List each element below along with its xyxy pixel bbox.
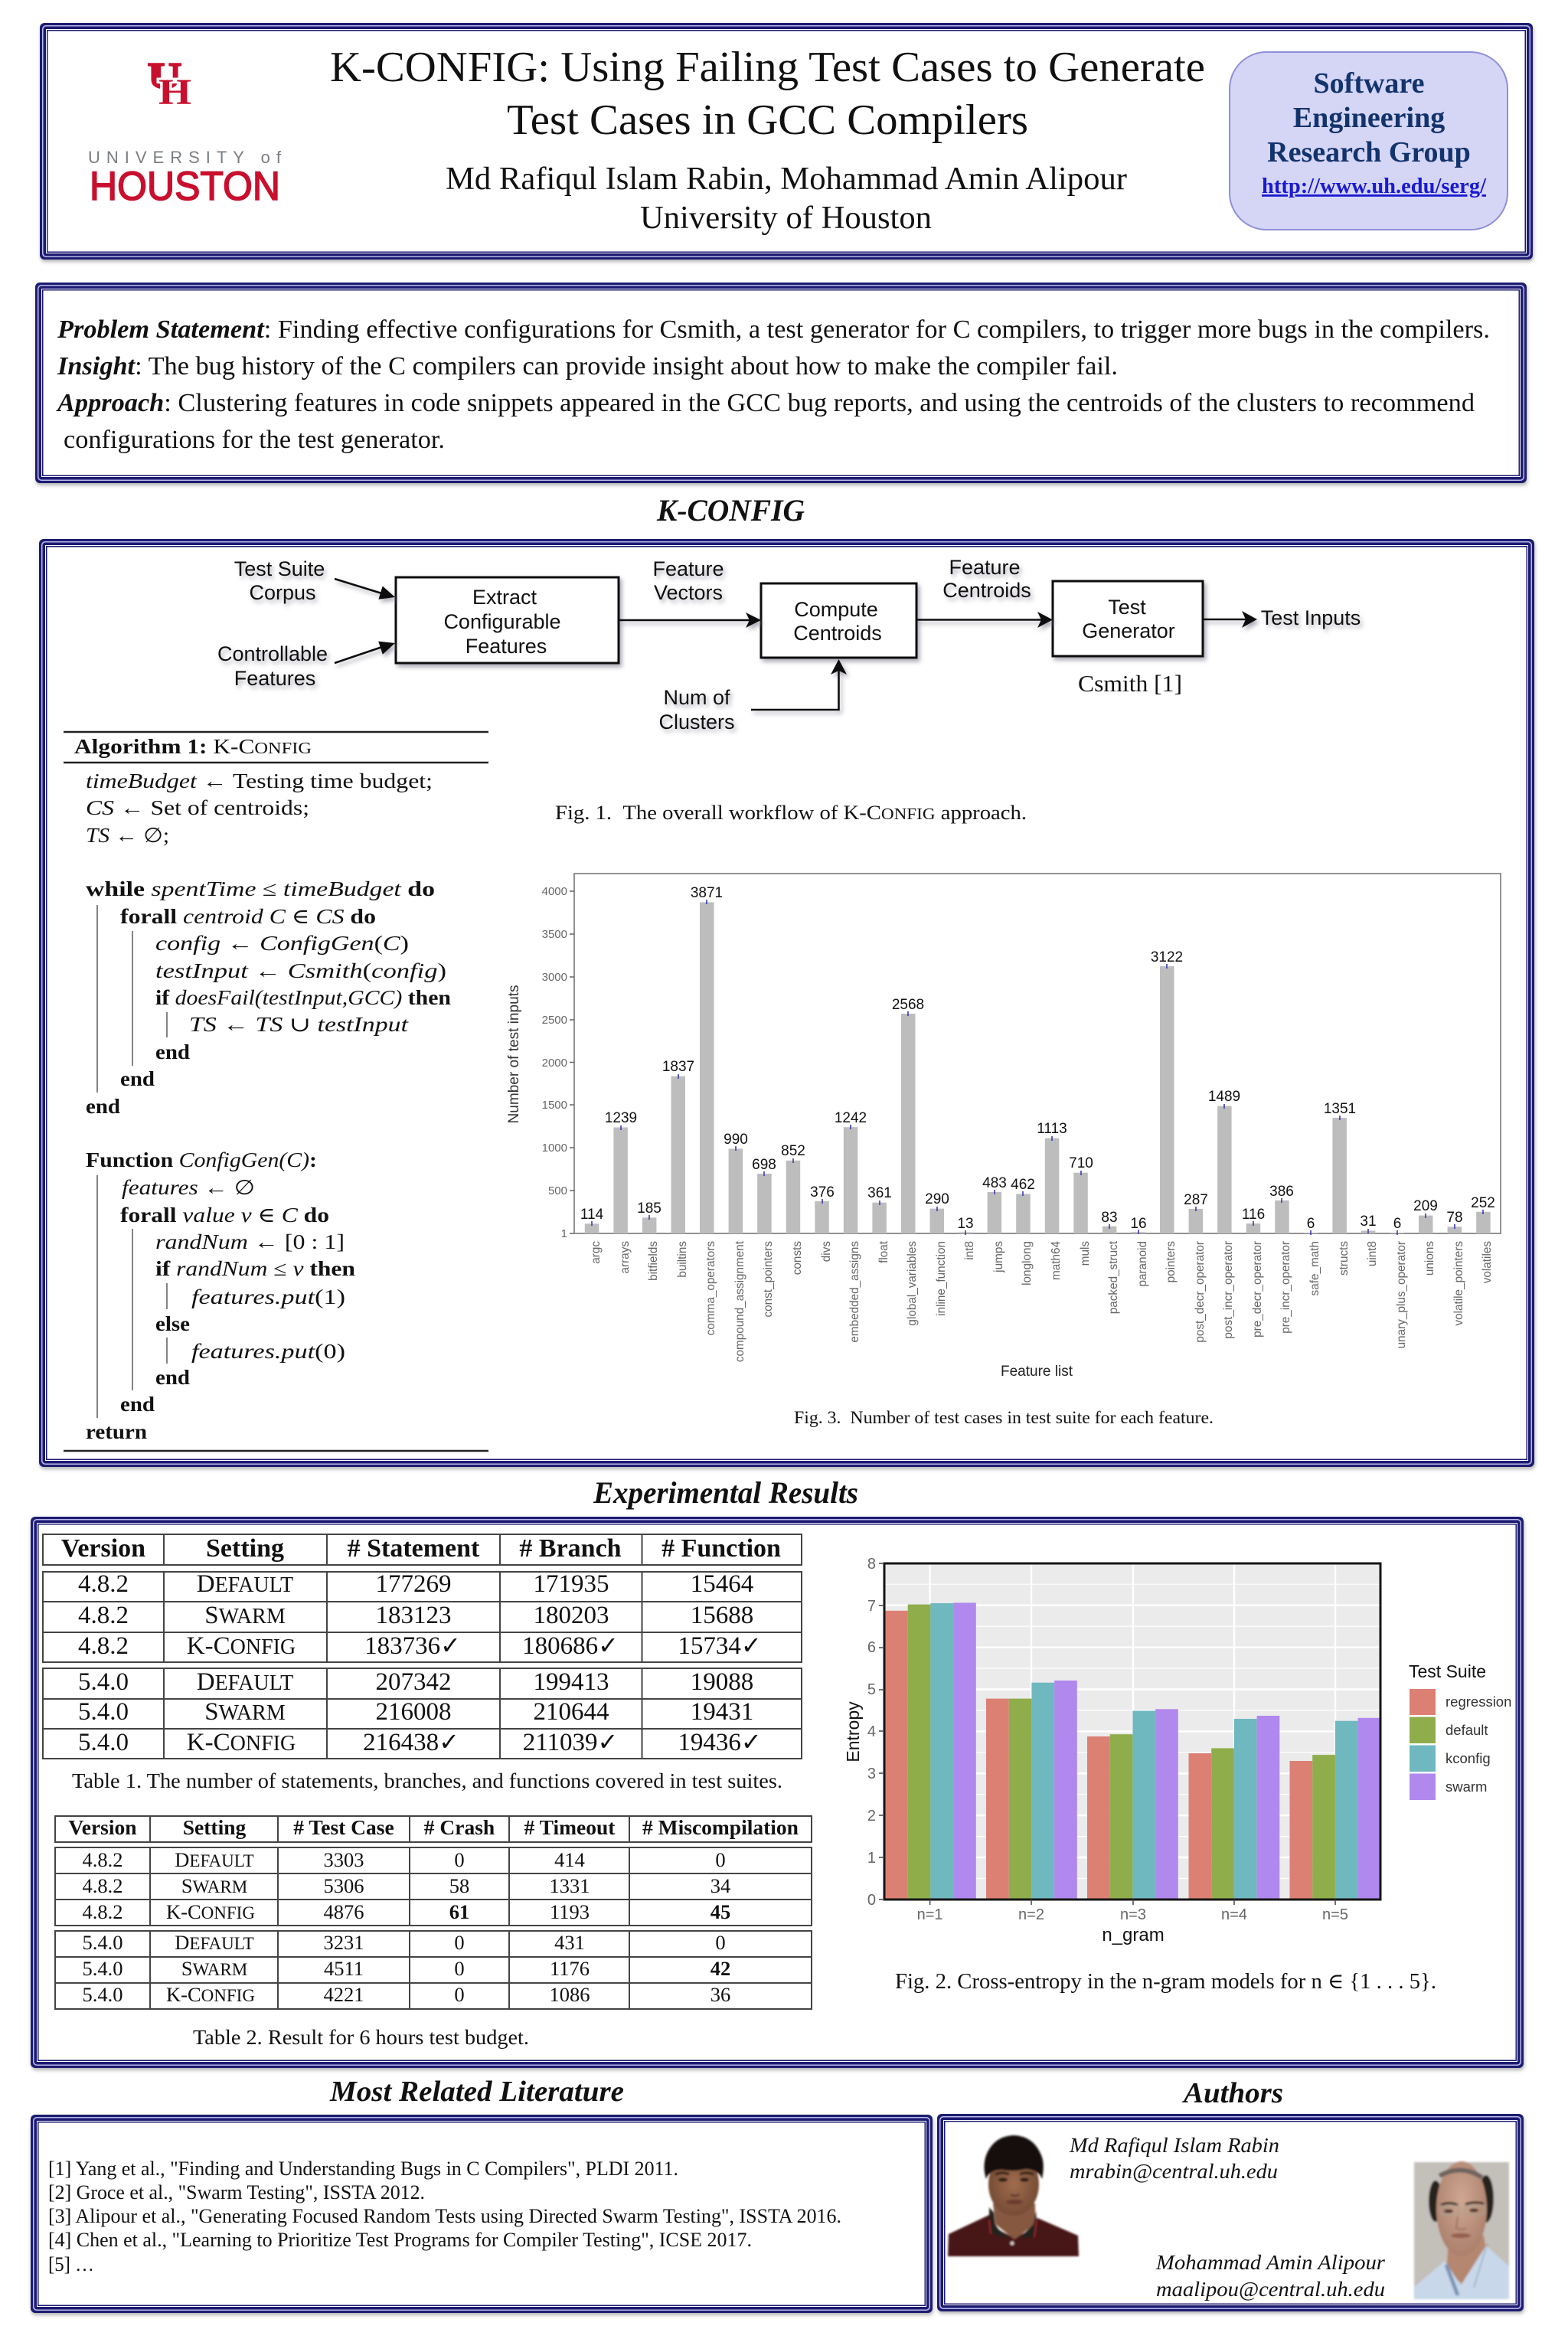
x axis labels: pre_incr_operator <box>1279 1241 1292 1334</box>
workflow diagram: Features <box>466 635 547 658</box>
workflow diagram: Controllable <box>217 642 328 665</box>
workflow diagram: Clusters <box>658 710 735 733</box>
x axis labels: packed_struct <box>1107 1240 1120 1314</box>
table 2 rows: K-CONFIG <box>166 1983 255 2006</box>
table 1 rows: K-CONFIG <box>187 1729 296 1756</box>
value labels: 116 <box>1242 1207 1265 1223</box>
table 1 rows: 211039✓ <box>523 1727 618 1756</box>
workflow diagram: Centroids <box>793 622 882 645</box>
authors and affiliation: Md Rafiqul Islam Rabin, Mohammad Amin Alipour <box>446 162 1127 197</box>
value labels: 2568 <box>892 997 924 1013</box>
workflow diagram <box>217 556 1361 733</box>
panel: header <box>40 23 1533 260</box>
callout: research group: http://www.uh.edu/serg/ <box>1262 175 1487 198</box>
algorithm lines: timeBudget ← Testing time budget; <box>86 769 433 792</box>
x axis: n=5 <box>1322 1906 1348 1923</box>
value labels: 698 <box>752 1157 776 1173</box>
table 2 rows: DEFAULT <box>175 1848 254 1871</box>
workflow diagram: Compute <box>794 598 878 621</box>
workflow diagram: Corpus <box>249 581 316 604</box>
panel: related literature <box>31 2115 933 2313</box>
x axis labels: pre_decr_operator <box>1251 1241 1264 1338</box>
bars: regression <box>885 1611 1312 1900</box>
workflow diagram: Generator <box>1082 619 1175 642</box>
legend: kconfig <box>1446 1750 1491 1766</box>
text: Alipour contact: maalipou@central.uh.edu <box>1156 2278 1385 2301</box>
x axis labels: comma_operators <box>704 1241 717 1335</box>
authors and affiliation: University of Houston <box>640 201 932 236</box>
x axis <box>917 1900 1348 1923</box>
table 2 rows: 3231 <box>323 1931 364 1954</box>
x axis labels: unions <box>1423 1241 1436 1276</box>
references list: [2] Groce et al., "Swarm Testing", ISSTA 2012. <box>48 2181 425 2203</box>
value labels: 78 <box>1446 1210 1463 1226</box>
algorithm lines: Function ConfigGen(C) : <box>86 1148 317 1171</box>
x axis labels: jumps <box>992 1241 1005 1273</box>
figure 2 caption: Fig. 2. Cross-entropy in the n-gram models for n ∈ {1 . . . 5}. <box>895 1970 1436 1994</box>
y axis: 2 <box>867 1808 876 1824</box>
value labels: 1837 <box>662 1059 694 1075</box>
logo wordmark: Houston: HOUSTON <box>90 164 280 209</box>
table 1 rows: 216438✓ <box>363 1727 459 1756</box>
table 1 rows: 15464 <box>691 1570 753 1598</box>
workflow diagram: Feature <box>652 557 724 580</box>
y axis: 3 <box>867 1766 876 1782</box>
x axis: n=3 <box>1120 1906 1146 1923</box>
value labels: 1489 <box>1208 1089 1240 1105</box>
table 2 header <box>68 1815 799 1839</box>
table 1 rows: DEFAULT <box>197 1570 293 1598</box>
workflow diagram: Test Inputs <box>1261 606 1361 629</box>
table 2 rows: 5.4.0 <box>83 1983 122 2006</box>
algorithm title: Algorithm 1: K-C ONFIG <box>74 735 312 758</box>
text: Alipour contact: Mohammad Amin Alipour <box>1155 2251 1386 2274</box>
callout: research group <box>1230 52 1508 230</box>
legend: regression <box>1446 1694 1511 1710</box>
logo wordmark: University of: UNIVERSITY of <box>88 148 282 167</box>
y axis: 1 <box>561 1227 567 1240</box>
x axis title: n_gram <box>1102 1925 1165 1945</box>
y axis <box>542 885 574 1240</box>
table 2 header: # Miscompilation <box>642 1815 799 1839</box>
algorithm lines: end <box>155 1366 190 1389</box>
approach text: configurations for the test generator. <box>64 426 445 454</box>
table 2 caption: Table 2. Result for 6 hours test budget. <box>193 2026 529 2049</box>
algorithm lines: else <box>155 1312 190 1335</box>
table 1 rows: K-CONFIG <box>187 1632 296 1660</box>
x axis labels: muls <box>1079 1241 1092 1266</box>
text: Rabin contact: Md Rafiqul Islam Rabin <box>1069 2134 1279 2157</box>
value labels: 361 <box>867 1185 892 1201</box>
value labels: 483 <box>982 1175 1007 1191</box>
table 2 rows: 4511 <box>324 1957 364 1980</box>
table 1 rows <box>78 1570 762 1756</box>
algorithm lines: if randNum ≤ v then <box>155 1257 355 1280</box>
table 1 rows: 4.8.2 <box>78 1570 129 1598</box>
panel: K-CONFIG approach <box>39 539 1534 1467</box>
x axis labels: global_variables <box>906 1241 919 1326</box>
algorithm lines: TS ← ∅; <box>86 824 169 847</box>
panel: problem statement <box>35 283 1527 483</box>
icon: UH monogram: H <box>158 72 191 113</box>
callout: research group: Software <box>1314 67 1424 100</box>
legend <box>1409 1661 1511 1800</box>
table 1 rows: 171935 <box>533 1570 609 1598</box>
table 1 rows: 199413 <box>533 1668 609 1696</box>
table 2 rows: 4221 <box>323 1983 364 2006</box>
title: Test Cases in GCC Compilers <box>507 96 1028 144</box>
table 2 rows: 5.4.0 <box>83 1957 122 1980</box>
value labels: 31 <box>1360 1214 1377 1230</box>
algorithm lines: features ← ∅ <box>122 1176 255 1199</box>
bars: kconfig <box>930 1603 1358 1900</box>
x axis labels: bitfields <box>647 1241 660 1281</box>
table 1 rows: 180686✓ <box>522 1631 619 1660</box>
algorithm lines: TS ← TS ∪ testInput <box>189 1013 410 1036</box>
table 2 rows: 61 <box>449 1900 469 1923</box>
figure 1 caption: Fig. 1. The overall workflow of K-C ONFIG approach. <box>555 802 1027 824</box>
x axis labels: divs <box>820 1241 833 1262</box>
x axis labels: post_decr_operator <box>1194 1241 1207 1343</box>
x axis labels: structs <box>1338 1241 1351 1276</box>
approach text: Approach: Clustering features in code snippets appeared in the GCC bug reports, and using the centroids of the clusters to recommend <box>56 389 1475 417</box>
x axis labels: volatiles <box>1481 1241 1494 1283</box>
table 2 rows: 0 <box>454 1931 465 1954</box>
table 2 rows: 0 <box>454 1957 465 1980</box>
workflow diagram: Test Suite <box>234 557 325 580</box>
approach text <box>56 389 1475 454</box>
y axis: 1500 <box>542 1099 567 1112</box>
table 1 rows: 4.8.2 <box>78 1602 129 1629</box>
table 2 header: # Test Case <box>293 1815 394 1839</box>
table 1 rows: 19431 <box>691 1698 753 1726</box>
algorithm lines: end <box>120 1067 155 1090</box>
value labels: 83 <box>1101 1210 1118 1226</box>
table 2 rows <box>83 1848 730 2006</box>
table 2 rows: 45 <box>710 1900 730 1923</box>
value labels: 852 <box>781 1143 805 1159</box>
value labels: 3122 <box>1151 949 1183 965</box>
y axis: 2500 <box>542 1014 567 1027</box>
table 1 rows: 19088 <box>691 1668 753 1696</box>
workflow diagram: Centroids <box>942 579 1031 602</box>
value labels: 6 <box>1307 1216 1315 1232</box>
table 2 rows: 42 <box>710 1957 730 1980</box>
title <box>330 44 1205 144</box>
workflow diagram: Extract <box>472 586 537 609</box>
table 2 rows: 4.8.2 <box>83 1900 122 1923</box>
y axis <box>867 1556 884 1909</box>
table 2 rows: 5.4.0 <box>83 1931 122 1954</box>
x axis labels: compound_assignment <box>733 1240 746 1362</box>
x axis title: Feature list <box>1001 1364 1073 1380</box>
table 2 rows: DEFAULT <box>175 1931 254 1954</box>
x axis labels: consts <box>791 1241 804 1275</box>
value labels: 6 <box>1393 1216 1401 1232</box>
text: Rabin contact: mrabin@central.uh.edu <box>1070 2160 1278 2183</box>
algorithm lines: CS ← Set of centroids; <box>86 796 309 819</box>
x axis labels: float <box>877 1240 890 1263</box>
y axis: 7 <box>867 1598 876 1615</box>
algorithm lines: features.put (1) <box>191 1285 345 1308</box>
x axis labels: unary_plus_operator <box>1395 1241 1408 1348</box>
table 1 header: # Function <box>662 1534 781 1563</box>
y axis title: Number of test inputs <box>506 985 522 1124</box>
references list <box>48 2158 841 2275</box>
value labels: 13 <box>957 1216 974 1232</box>
table 1 rows: 5.4.0 <box>78 1729 129 1756</box>
algorithm lines: if doesFail(testInput,GCC) then <box>155 986 451 1009</box>
x axis labels: paranoid <box>1136 1241 1149 1287</box>
x axis labels: embedded_assigns <box>848 1241 861 1343</box>
table 2 rows: 58 <box>449 1874 469 1897</box>
x axis labels: volatile_pointers <box>1452 1241 1465 1326</box>
value labels: 710 <box>1069 1155 1093 1171</box>
x axis labels: builtins <box>676 1241 689 1278</box>
workflow diagram: Vectors <box>654 581 723 604</box>
bars <box>585 902 1491 1233</box>
table 2 rows: SWARM <box>181 1874 247 1897</box>
table 2: bugs found <box>55 1815 812 2009</box>
table 1 rows: 177269 <box>375 1570 452 1598</box>
table 1 rows: 4.8.2 <box>78 1632 129 1660</box>
table 2 header: # Timeout <box>524 1815 616 1839</box>
figure 3 caption: Fig. 3. Number of test cases in test suite for each feature. <box>794 1408 1214 1427</box>
legend: Test Suite <box>1409 1661 1486 1681</box>
table 2 rows: 1176 <box>550 1957 590 1980</box>
x axis: n=4 <box>1221 1906 1247 1923</box>
table 2 rows: 0 <box>454 1983 465 2006</box>
label: Csmith: Csmith [1] <box>1078 670 1182 697</box>
table 1 rows: 5.4.0 <box>78 1698 129 1726</box>
table 2 rows: 4876 <box>323 1900 364 1923</box>
x axis: n=1 <box>917 1906 943 1923</box>
text: Alipour contact <box>1155 2251 1386 2301</box>
table 2 rows: 5306 <box>323 1874 364 1897</box>
algorithm lines: features.put (0) <box>191 1340 345 1363</box>
table 2 header: # Crash <box>424 1815 495 1839</box>
x axis labels: math64 <box>1050 1241 1063 1280</box>
table 1 rows: SWARM <box>204 1698 286 1726</box>
table 2 rows: 34 <box>710 1874 730 1897</box>
callout: research group: Engineering <box>1293 102 1445 134</box>
value labels: 462 <box>1011 1177 1035 1193</box>
x axis labels: const_pointers <box>762 1241 775 1317</box>
heading: Most Related Literature: Most Related Literature <box>329 2076 624 2108</box>
callout: research group: Research Group <box>1267 136 1471 168</box>
table 2 rows: 0 <box>715 1848 726 1871</box>
x axis labels: safe_math <box>1308 1241 1321 1295</box>
table 2 rows: SWARM <box>181 1957 247 1980</box>
x axis labels: arrays <box>619 1241 632 1274</box>
portrait: Rabin <box>948 2135 1079 2256</box>
algorithm lines: end <box>86 1095 120 1118</box>
table 2 rows: 4.8.2 <box>83 1848 122 1871</box>
y axis: 3500 <box>542 928 567 941</box>
legend: swarm <box>1446 1779 1487 1795</box>
workflow diagram: Num of <box>663 686 730 709</box>
algorithm lines: return <box>86 1420 147 1443</box>
algorithm lines: config ← ConfigGen (C) <box>155 932 409 955</box>
references list: [3] Alipour et al., "Generating Focused Random Tests using Directed Swarm Testing", ISSTA 2016. <box>48 2205 841 2227</box>
table 2 rows: 0 <box>454 1848 465 1871</box>
value labels: 386 <box>1269 1184 1294 1200</box>
table 1 caption: Table 1. The number of statements, branches, and functions covered in test suites. <box>72 1769 782 1792</box>
x axis labels: inline_function <box>935 1241 948 1316</box>
x axis labels: longlong <box>1021 1241 1034 1285</box>
table 1: coverage <box>43 1534 802 1759</box>
bars: default <box>908 1605 1335 1900</box>
table 2 header: Setting <box>183 1815 247 1839</box>
y axis: 4 <box>867 1723 876 1740</box>
x axis labels: uint8 <box>1366 1241 1379 1266</box>
bars: swarm <box>953 1602 1380 1900</box>
portrait: Alipour <box>1414 2161 1509 2299</box>
x axis labels <box>590 1240 1494 1362</box>
table 1 header: Setting <box>206 1534 284 1563</box>
table 2 rows: 1193 <box>550 1900 590 1923</box>
y axis: 8 <box>867 1556 876 1573</box>
insight text: Insight: The bug history of the C compilers can provide insight about how to make the compiler fail. <box>57 352 1118 381</box>
y axis title: Entropy <box>843 1701 863 1762</box>
y axis: 500 <box>548 1184 567 1197</box>
table 1 rows: SWARM <box>204 1602 286 1629</box>
table 1 rows: 15734✓ <box>678 1631 762 1660</box>
table 1 rows: 210644 <box>533 1698 609 1726</box>
table 1 rows: DEFAULT <box>197 1668 293 1696</box>
value labels: 3871 <box>691 885 723 901</box>
arrows <box>335 579 1257 710</box>
value labels: 114 <box>580 1207 604 1223</box>
x axis: n=2 <box>1018 1906 1044 1923</box>
algorithm lines: while spentTime ≤ timeBudget do <box>86 877 435 900</box>
bar chart: test cases per feature <box>506 874 1501 1380</box>
value labels: 185 <box>637 1200 662 1217</box>
x axis labels: argc <box>590 1241 603 1264</box>
value labels: 1239 <box>605 1110 637 1126</box>
references list: [1] Yang et al., "Finding and Understanding Bugs in C Compilers", PLDI 2011. <box>48 2158 678 2180</box>
value labels: 16 <box>1130 1216 1147 1232</box>
y axis: 1000 <box>542 1142 567 1155</box>
table 2 rows: 0 <box>715 1931 726 1954</box>
workflow diagram: Test <box>1108 596 1146 619</box>
references list: [4] Chen et al., "Learning to Prioritize Test Programs for Compiler Testing", ICSE 2017. <box>48 2229 752 2251</box>
y axis: 2000 <box>542 1057 567 1070</box>
grouped bar chart: cross-entropy <box>843 1556 1511 1945</box>
table 1 rows: 19436✓ <box>678 1727 762 1756</box>
table 1 rows: 183123 <box>375 1602 452 1629</box>
value labels: 376 <box>810 1184 835 1200</box>
heading: K-CONFIG: K-CONFIG <box>656 493 805 528</box>
table 2 rows: 1331 <box>550 1874 590 1897</box>
table 1 rows: 15688 <box>691 1602 753 1629</box>
legend: default <box>1446 1722 1488 1738</box>
algorithm block <box>64 732 488 1451</box>
panel: authors <box>937 2114 1524 2311</box>
title: K-CONFIG: Using Failing Test Cases to Generate <box>330 44 1205 91</box>
algorithm lines: randNum ← [0 : 1] <box>155 1230 345 1253</box>
x axis labels: int8 <box>963 1241 976 1260</box>
workflow diagram: Feature <box>949 556 1021 579</box>
table 2 rows: 4.8.2 <box>83 1874 122 1897</box>
y axis: 3000 <box>542 971 567 984</box>
y axis: 5 <box>867 1681 876 1698</box>
table 2 rows: 431 <box>554 1931 585 1954</box>
table 1 header: Version <box>61 1534 145 1563</box>
table 1 header: # Statement <box>348 1534 480 1563</box>
table 2 rows: 414 <box>554 1848 585 1871</box>
logo: University of Houston <box>88 56 282 209</box>
algorithm lines: end <box>120 1393 155 1416</box>
algorithm lines <box>86 769 451 1443</box>
table 1 rows: 183736✓ <box>364 1631 461 1660</box>
table 2 header: Version <box>68 1815 137 1839</box>
value labels: 209 <box>1413 1198 1438 1214</box>
table 2 rows: 3303 <box>323 1848 364 1871</box>
table 1 header <box>61 1534 781 1563</box>
table 1 rows: 180203 <box>533 1602 609 1629</box>
value labels: 1242 <box>835 1110 867 1126</box>
heading: Experimental Results: Experimental Results <box>593 1475 858 1510</box>
icon: UH monogram <box>148 56 191 113</box>
algorithm lines: forall centroid C ∈ CS do <box>120 905 376 928</box>
authors and affiliation <box>446 162 1127 236</box>
text: Rabin contact <box>1069 2134 1279 2183</box>
table 2 rows: 1086 <box>550 1983 590 2006</box>
algorithm lines: forall value v ∈ C do <box>120 1204 329 1227</box>
icon: UH monogram: U <box>148 56 181 96</box>
table 1 rows: 216008 <box>375 1698 452 1726</box>
table 1 rows: 5.4.0 <box>78 1668 129 1696</box>
problem statement text: Problem Statement: Finding effective configurations for Csmith, a test generator for C compilers, to trigger more bugs in the compilers. <box>57 315 1490 344</box>
value labels: 290 <box>925 1191 949 1207</box>
y axis: 1 <box>867 1850 876 1867</box>
x axis labels: pointers <box>1165 1241 1178 1282</box>
value labels: 990 <box>724 1132 748 1148</box>
value labels: 1113 <box>1037 1121 1067 1137</box>
x axis labels: post_incr_operator <box>1222 1241 1235 1339</box>
algorithm lines: end <box>155 1040 190 1063</box>
heading: Authors: Authors <box>1182 2077 1283 2109</box>
value labels: 287 <box>1184 1192 1208 1208</box>
algorithm lines: testInput ← Csmith (config ) <box>155 959 446 982</box>
y axis: 4000 <box>542 885 567 898</box>
workflow diagram: Configurable <box>443 610 561 633</box>
table 2 rows: 36 <box>710 1983 730 2006</box>
panel: experimental results <box>31 1517 1524 2068</box>
y axis: 0 <box>867 1892 876 1909</box>
workflow diagram: Features <box>234 667 315 690</box>
table 1 header: # Branch <box>519 1534 622 1563</box>
table 1 rows: 207342 <box>375 1668 452 1696</box>
value labels: 252 <box>1471 1195 1495 1211</box>
table 2 rows: K-CONFIG <box>166 1900 255 1923</box>
y axis: 6 <box>867 1639 876 1656</box>
value labels: 1351 <box>1324 1101 1356 1117</box>
references list: [5] … <box>48 2253 94 2275</box>
value labels <box>580 885 1495 1232</box>
